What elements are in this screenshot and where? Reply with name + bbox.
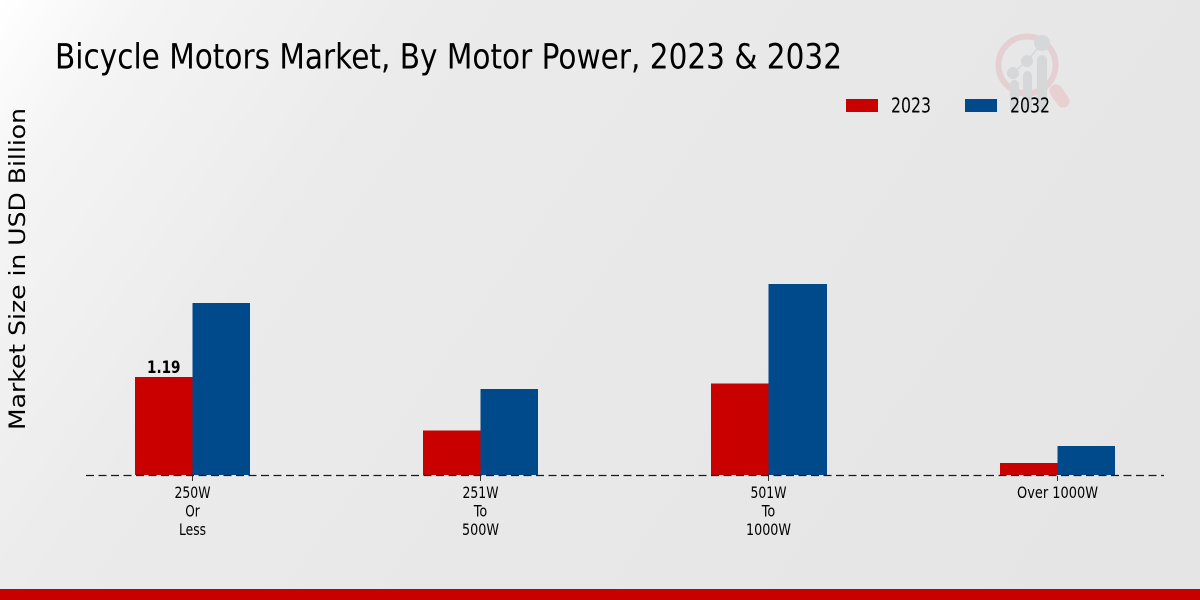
x tick label: 250W Or Less: 250W: [174, 483, 211, 502]
group: over 1000W: [1000, 446, 1115, 475]
bottom bar: [0, 589, 1200, 600]
y axis label: Market Size in USD Billion: [5, 108, 31, 430]
group: 501W to 1000W: [711, 284, 827, 475]
group: 250W or less: [135, 303, 250, 475]
x tick label: 251W To 500W: To: [473, 502, 487, 520]
icon: watermark logo: [998, 35, 1063, 112]
x tick label: 251W To 500W: [462, 483, 499, 539]
x tick label: 501W To 1000W: 1000W: [746, 520, 791, 539]
x tick label: 250W Or Less: [174, 483, 211, 539]
x tick label: 501W To 1000W: 501W: [750, 483, 787, 502]
title: Bicycle Motors Market, By Motor Power, 2023 & 2032: [55, 38, 842, 78]
legend: [846, 94, 1050, 118]
legend item: 2032: 2032: [1010, 94, 1050, 118]
x axis baseline: [86, 474, 1164, 476]
x tick label: 251W To 500W: 251W: [462, 483, 499, 502]
x tick label: 250W Or Less: Less: [179, 520, 206, 539]
data label: 1.19: [147, 358, 180, 377]
x tick label: Over 1000W: Over 1000W: [1017, 483, 1098, 502]
legend item: 2032: [965, 94, 1050, 118]
x tick label: 250W Or Less: Or: [185, 502, 200, 520]
x tick label: 501W To 1000W: To: [761, 502, 775, 520]
bar chart: [86, 284, 1164, 481]
x tick label: 501W To 1000W: [746, 483, 791, 539]
group: 251W to 500W: [423, 389, 538, 475]
legend item: 2023: 2023: [891, 94, 931, 118]
x tick label: 251W To 500W: 500W: [462, 520, 499, 539]
legend item: 2023: [846, 94, 931, 118]
